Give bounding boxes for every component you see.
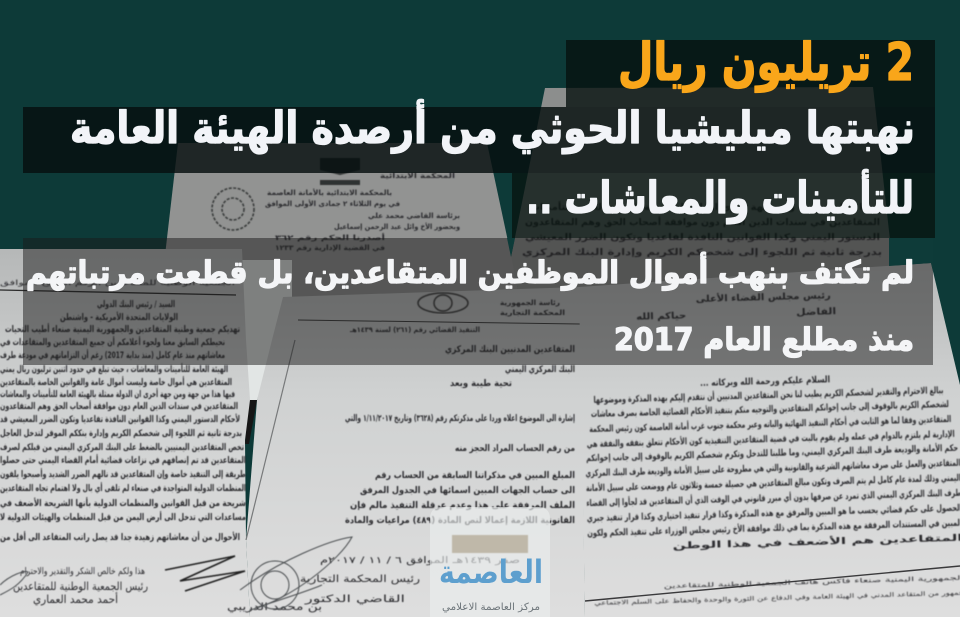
document: left letter to the World Bank: الأحوال من أن معاشاتهم زهيدة جدا قد يصل راتب المتقاعد الى أقل من <box>0 531 240 543</box>
document: center bank order letter: من رقم الحساب المراد الحجز منه <box>455 444 575 454</box>
document: left letter to the World Bank: تهديكم جمعية وطنية المتقاعدين والجمهورية اليمنية صنعاء أطيب التحيات <box>5 323 240 335</box>
document: left letter to the World Bank: السيد / رئيس البنك الدولي <box>97 300 175 310</box>
document: left letter to the World Bank: نحيطكم السابق معنا ولجوء أعلامكم أن جميع المتقاعدين والمتقاعدات في <box>0 336 225 348</box>
document: center bank order letter: المتقاعدين المدنيين البنك المركزي <box>445 345 575 355</box>
document: left letter to the World Bank: المتقاعدين قد تم إنصافهم في نزاعات قضائية أمام القضاء اليمني حتى حصلوا <box>0 454 246 466</box>
document: right letter to the judicial council: رئيس مجلس القضاء الأعلى <box>696 289 831 305</box>
document: left letter to the World Bank: لأحكام الدستور اليمني وكذا القوانين النافذة تقاعديا وتكون الضرر المعيشي قد <box>0 413 240 425</box>
document: center bank order letter <box>0 287 585 617</box>
document: left letter to the World Bank: المتقاعدين في سندات الدين العام دون موافقة أصحاب الحق وهم المتقاعدون <box>0 400 238 412</box>
document: middle court letter: أصدرنا الحكم رقم ٣٦٢ <box>275 233 385 242</box>
document: left letter to the World Bank: هذا ولكم خالص الشكر والتقدير والاحترام <box>20 567 145 577</box>
document: middle court letter: برئاسة القاضي محمد علي <box>368 212 460 220</box>
logo: Al-Asima media center watermark: العاصمة <box>439 553 543 591</box>
document: right letter to the judicial council: الفاضل <box>796 307 836 318</box>
document: center bank order letter: رئاسة الجمهورية <box>500 299 560 307</box>
logo: Al-Asima media center watermark <box>430 507 550 617</box>
document: right letter to the judicial council <box>579 263 960 617</box>
document: left letter to the World Bank: فيها هذا من جهة ومن جهة أخرى ان الدولة ممثلة بالهيئة العامة للتأمينات والمعاشات <box>0 388 235 400</box>
document: center bank order letter: القاضي الدكتور <box>303 594 405 605</box>
document: left letter to the World Bank: المنظمات الدولية المتواجدة في صنعاء لم تلقى أي بال ولا اهتمام تجاه المتقاعدين <box>0 482 246 494</box>
document: light sheet under the torn edge <box>236 260 292 444</box>
logo: Al-Asima media center watermark: مركز العاصمة الاعلامي <box>442 602 540 613</box>
document: left letter to the World Bank: الهيئة العامة للتأمينات والمعاشات ، حيث تبلغ في حدود اثنين ترليون ريال يمني <box>0 363 228 375</box>
document: center bank order letter: صفر ١٤٣٩هـ الموافق ٦ / ١١ / ٢٠١٧م <box>320 556 520 566</box>
document: left letter to the World Bank: رئيس الجمعية الوطنية للمتقاعدين <box>13 580 148 593</box>
document: middle court letter: بالمحكمة الابتدائية بالأمانة العاصمة <box>267 188 392 197</box>
document: center bank order letter: تحية طيبة وبعد <box>450 379 512 389</box>
document: left letter to the World Bank: بدرجة ثانية ثم اللجوء إلى شخصكم الكريم وإدارة بنككم الموقر لتدخل العاجل <box>0 429 242 439</box>
document: center bank order letter: بن محمد الدريبي <box>227 602 322 613</box>
document: right letter to the judicial council: جمهور من المتقاعد المدني في الهيئة العامة وفي الدفاع عن الثورة والوحدة والحفاظ على السلم الاجتماعي <box>594 590 960 607</box>
document: center bank order letter: الى حساب الجهات المبين اسمائها في الجدول المرفق <box>360 486 575 496</box>
document: center bank order letter: رئيس المحكمة التجارية <box>300 574 420 585</box>
title: 2 trillion riyals: 2 تريليون ريال <box>618 33 914 93</box>
document: back right letter: الدستور اليمني وكذا القوانين النافذة لقاعديا وتكون الضرر المعيشي <box>525 233 880 243</box>
document: center bank order letter: القانونية اللازمة إعمالا لنص المادة (٤٨٩) مراعيات والمادة <box>345 516 575 526</box>
document: back right letter: فيها هذا من جهة ومن جهة أخرى ان الدولة ممثلة بالهيئة العامة للتأمينات <box>530 201 880 213</box>
document: left letter to the World Bank: معاشاتهم منذ عام كامل (منذ بداية 2017) رغم أن التزاماتهم في مودعة طرف <box>0 349 225 361</box>
document: left letter to the World Bank: شريحة من قبل القوانين والمنظمات الدولية بأنها الشريحة الأضعف في <box>0 497 246 509</box>
subheading: since early 2017: منذ مطلع العام 2017 <box>614 322 914 358</box>
document: center bank order letter: المحكمة التجارية <box>500 309 565 317</box>
document: back right letter <box>511 87 900 300</box>
document: center bank order letter: البنك المركزي اليمني <box>505 365 575 375</box>
icon: court stamp <box>212 188 254 230</box>
icon: republic emblem <box>320 158 360 185</box>
document: center bank order letter: التنفيذ القضائي رقم (٢٦١) لسنة ١٤٣٩هـ <box>349 326 480 334</box>
document: left letter to the World Bank: تخص المتقاعدين اليمنيين بالضغط على البنك المركزي اليمني من قبلكم لصرف <box>0 443 244 453</box>
document: middle court letter: وبحضور الأخ وائل عبد الرحمن إسماعيل <box>334 222 460 231</box>
document: left letter to the World Bank: أحمد محمد العماري <box>33 592 118 606</box>
document: left letter to the World Bank: المتقاعدين هي أموال خاصة وليست أموال عامة والقوانين الخاصة بالمتقاعدين <box>0 376 232 388</box>
document: middle court letter: في يوم الثلاثاء ٢ جمادى الأولى الموافق <box>265 199 400 208</box>
icon: signature and round stamp <box>0 537 352 610</box>
document: left letter to the World Bank: الولايات المتحدة الأمريكية - واشنطن <box>60 311 178 323</box>
document: right letter to the judicial council: السلام عليكم ورحمة الله وبركاته ... <box>700 375 830 389</box>
icon: center letter emblem <box>418 293 468 313</box>
document: left letter to the World Bank: مساعدات التي تدخل الى أرض اليمن من قبل المنظمات والهيئات الدولية لا <box>0 511 246 523</box>
document: middle court letter: في القضية الإدارية رقم ١٢٣٣ <box>275 244 385 252</box>
document: middle court letter: المحكمة الابتدائية <box>380 172 455 180</box>
document: right letter to the judicial council: حياكم الله <box>636 311 686 323</box>
document: right letter to the judicial council: المتقاعدين هم الأضعف في هذا الوطن <box>672 532 960 552</box>
document: left letter to the World Bank <box>0 249 250 617</box>
document: back right letter: المتقاعدين في سندات الدين العام دون موافقة أصحاب الحق وهم المتقاعدون <box>525 216 880 228</box>
banner: dark strips behind the heading lines <box>23 40 935 365</box>
document: center bank order letter: المبلغ المبين في مذكراتنا السابقة من الحساب رقم <box>375 471 575 481</box>
document: left letter to the World Bank: طريقة إلى التنفيذ خاصة وإن المتقاعدين قد نالهم الضرر الشديد وأصبحوا يلقون <box>0 468 246 480</box>
document: center bank order letter: إشارة الى الموضوع اعلاه وردا على مذكرتكم رقم (٣٦٢٨) وتاريخ ١/١١/٢٠١٧ والتي <box>345 414 575 424</box>
document: left letter to the World Bank: الجمعية الوطنية للمتقاعدين الرقم التاريخ الموافق <box>0 279 235 287</box>
document: middle court letter <box>160 143 520 300</box>
document: center bank order letter: الملف المرفقة على هذا وعدم عرقلة التنفيذ مالم فإن <box>350 501 575 511</box>
document: right letter to the judicial council: الجمهورية اليمنية صنعاء فاكس هاتف الجمعية الوطنية للمتقاعدين <box>664 575 960 590</box>
document: back right letter: بدرجة ثانية ثم اللجوء إلى شخصكم الكريم وإدارة البنك المركزي <box>522 248 882 258</box>
